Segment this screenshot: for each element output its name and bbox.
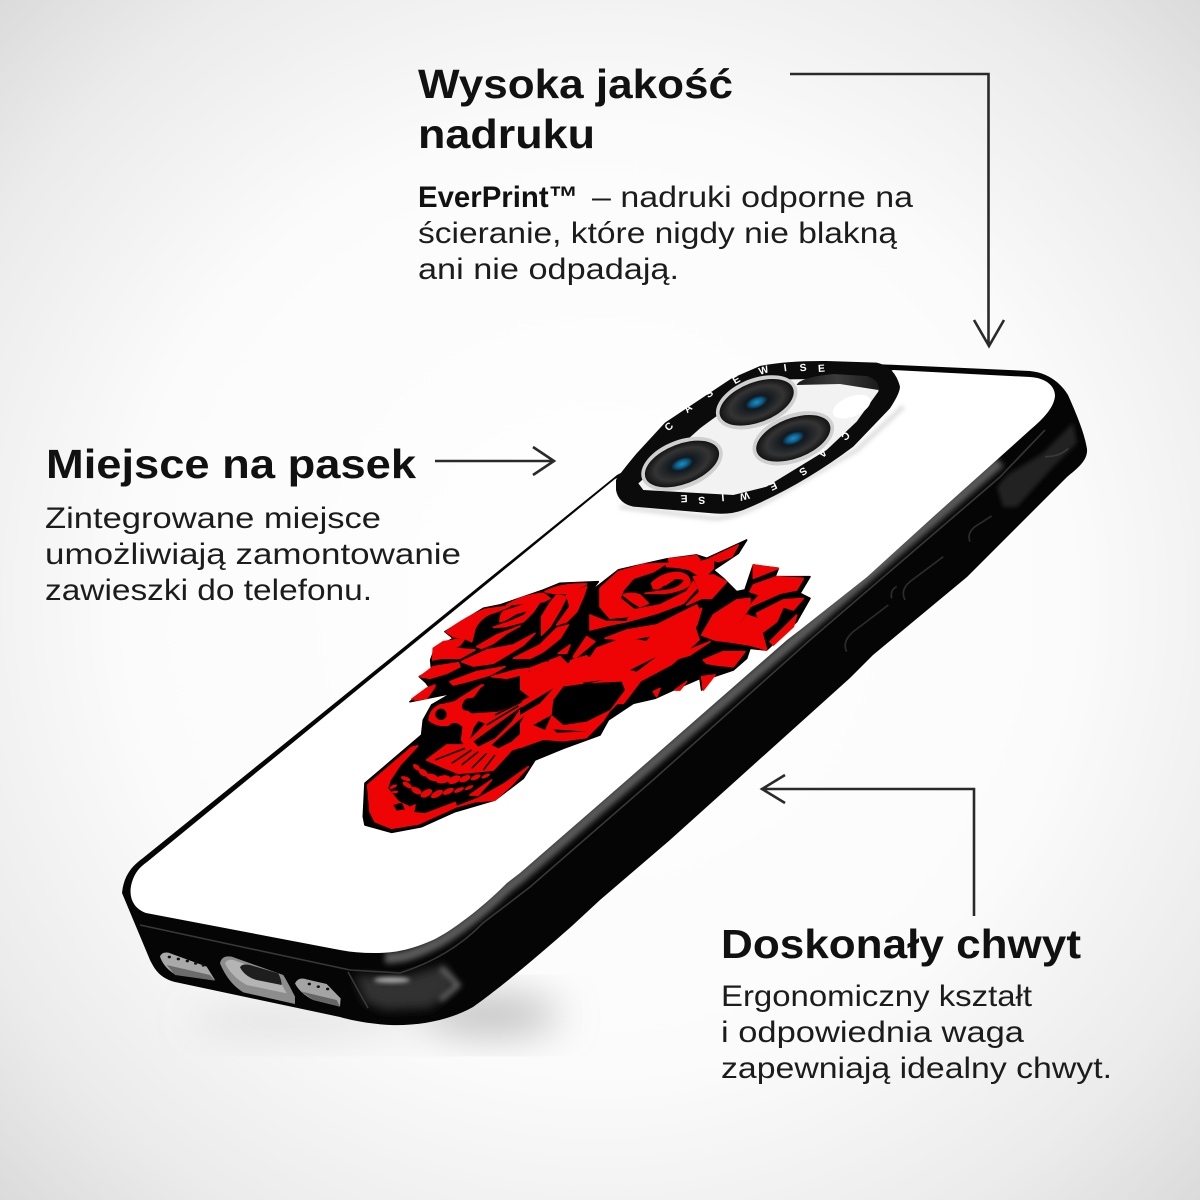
case body [122,362,1087,1025]
forehead patch [535,625,700,690]
right rose and forehead [590,545,803,703]
bump opening [638,378,878,495]
description [418,181,913,286]
description: i odpowiednia waga [721,1016,1024,1049]
skull lower: jaw, nose, teeth [368,670,555,828]
heading: Miejsce na pasek [46,441,416,487]
brand text top: CASEWISE [663,363,826,434]
description: zapewniają idealny chwyt. [721,1052,1112,1085]
inner edge glow [385,462,1000,958]
flash [829,390,874,423]
phone case [122,361,1087,1025]
description: EverPrint™ [418,181,578,214]
description: ani nie odpadają. [418,253,679,286]
teeth [389,763,491,800]
left rose [412,584,620,700]
description: Ergonomiczny kształt [721,980,1033,1013]
silhouette [363,540,810,832]
lens top [708,365,805,440]
side buttons [845,448,1068,652]
inner shade [797,374,878,390]
heading: Doskonały chwyt [721,921,1081,967]
description: – nadruki odporne na [592,181,913,214]
brand text bottom: CASEWISE [680,429,851,505]
lens left [634,426,730,502]
description [721,980,1112,1085]
camera bump [616,361,903,518]
bump shadow [620,407,903,518]
bump frame [616,361,900,514]
callout: grip [721,921,1112,1085]
skull and roses artwork [363,540,810,832]
callout: strap mount [45,441,461,607]
heading: Wysoka jakość [418,61,733,107]
lens right [745,401,842,476]
description [45,502,461,607]
description: Zintegrowane miejsce [45,502,381,535]
phone shadow [190,995,560,1036]
callout: print quality: nadruku [418,111,595,157]
bottom ports [160,952,341,1007]
arrow: grip [762,775,974,916]
description: zawieszki do telefonu. [45,574,372,607]
camera control [997,423,1077,507]
jaw [368,746,457,828]
corner highlights [348,965,458,1010]
arrow: print quality [790,74,1004,346]
side ridge [140,430,1045,973]
description: ścieranie, które nigdy nie blakną [418,217,897,250]
right eye socket [520,647,657,748]
callout: print quality [418,61,913,286]
arrow: strap mount [435,447,554,475]
description: umożliwiają zamontowanie [45,538,461,571]
back panel [131,370,1055,953]
